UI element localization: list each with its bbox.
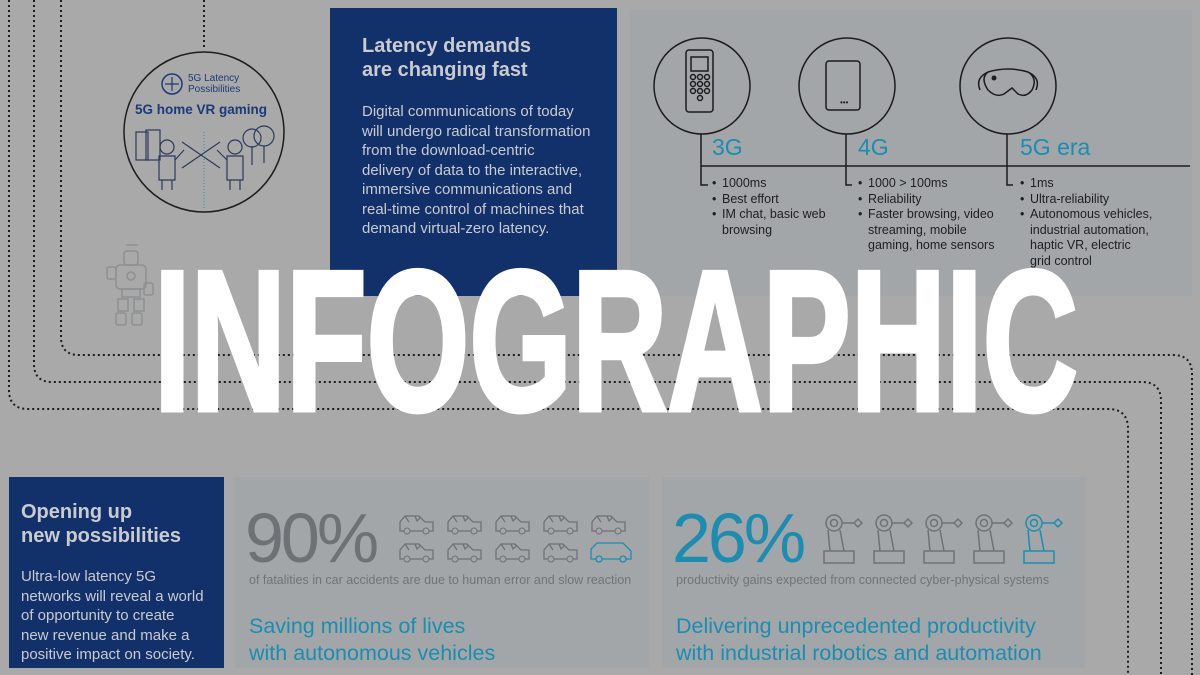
list: 4G: streaming, mobile [868,222,967,236]
heading: saving lives [249,614,495,665]
list: 5G [1020,176,1152,268]
heading: productivity [676,614,1042,665]
icon: robot arms [823,514,1063,564]
heading: productivity: with industrial robotics and automation [676,641,1042,665]
list: 4G: Faster browsing, video [868,207,994,221]
heading [21,501,181,547]
heading: Latency demands [362,35,531,57]
icon: 5G home VR gaming circle: Possibilities [188,84,240,95]
panel: 90% autonomous vehicles [235,477,649,668]
text block: will undergo radical transformation [362,122,590,140]
heading: Opening up [21,501,132,523]
stat: 90%: 90% [245,499,376,577]
panel: latency demands [330,8,617,296]
icon: 5G home VR gaming circle [123,51,285,213]
text block: networks will reveal a world [21,588,204,604]
heading: new possibilities [21,525,181,547]
list: 4G [858,176,994,252]
heading: saving lives: with autonomous vehicles [249,641,495,665]
list: 5G: 1ms [1030,176,1054,190]
heading [362,35,531,81]
text block [21,568,204,663]
list: 3G [712,176,826,236]
icon: cars grid [399,515,632,563]
heading: productivity: Delivering unprecedented productivity [676,614,1036,638]
text block: demand virtual-zero latency. [362,220,549,237]
list: 3G: browsing [722,222,772,236]
heading: saving lives: Saving millions of lives [249,614,465,638]
text block: from the download-centric [362,142,535,159]
text block: real-time control of machines that [362,200,584,218]
list: 4G: 1000 > 100ms [868,176,948,190]
list: 5G: Ultra-reliability [1030,192,1109,206]
list: 3G: 1000ms [722,176,766,190]
list: 4G: gaming, home sensors [868,238,994,252]
heading: are changing fast [362,59,528,81]
icon: 5G home VR gaming circle: 5G home VR gaming [135,102,267,117]
stat: 26%: 26% [672,499,803,577]
label: 4G: 4G [858,134,889,160]
label: 5G era: 5G era [1020,134,1090,160]
panel: opening up [9,477,224,668]
list: 3G: IM chat, basic web [722,207,826,221]
text block [362,103,590,237]
text block: positive impact on society. [21,646,195,663]
caption: productivity gains expected from connected cyber-physical systems [676,573,1049,587]
label: 3G: 3G [712,134,743,160]
list: 3G: Best effort [722,192,779,206]
text block: Digital communications of today [362,103,574,120]
text block: new revenue and make a [21,626,189,644]
text block: of opportunity to create [21,607,174,624]
panel: generations timeline [630,10,1192,296]
list: 5G: industrial automation, [1030,222,1149,236]
panel: generations timeline: ••• [840,98,849,107]
icon: 5G home VR gaming circle: 5G Latency [188,73,239,84]
caption: of fatalities in car accidents are due to human error and slow reaction [249,573,631,587]
text block: Ultra-low latency 5G [21,568,156,585]
icon: faded robot [106,244,154,326]
list: 5G: grid control [1030,254,1092,268]
list: 4G: Reliability [868,192,922,206]
text block: delivery of data to the interactive, [362,162,582,178]
list: 5G: Autonomous vehicles, [1030,207,1152,221]
text block: immersive communications and [362,181,572,198]
list: 5G: haptic VR, electric [1030,238,1131,252]
panel: 26% productivity [662,477,1085,668]
